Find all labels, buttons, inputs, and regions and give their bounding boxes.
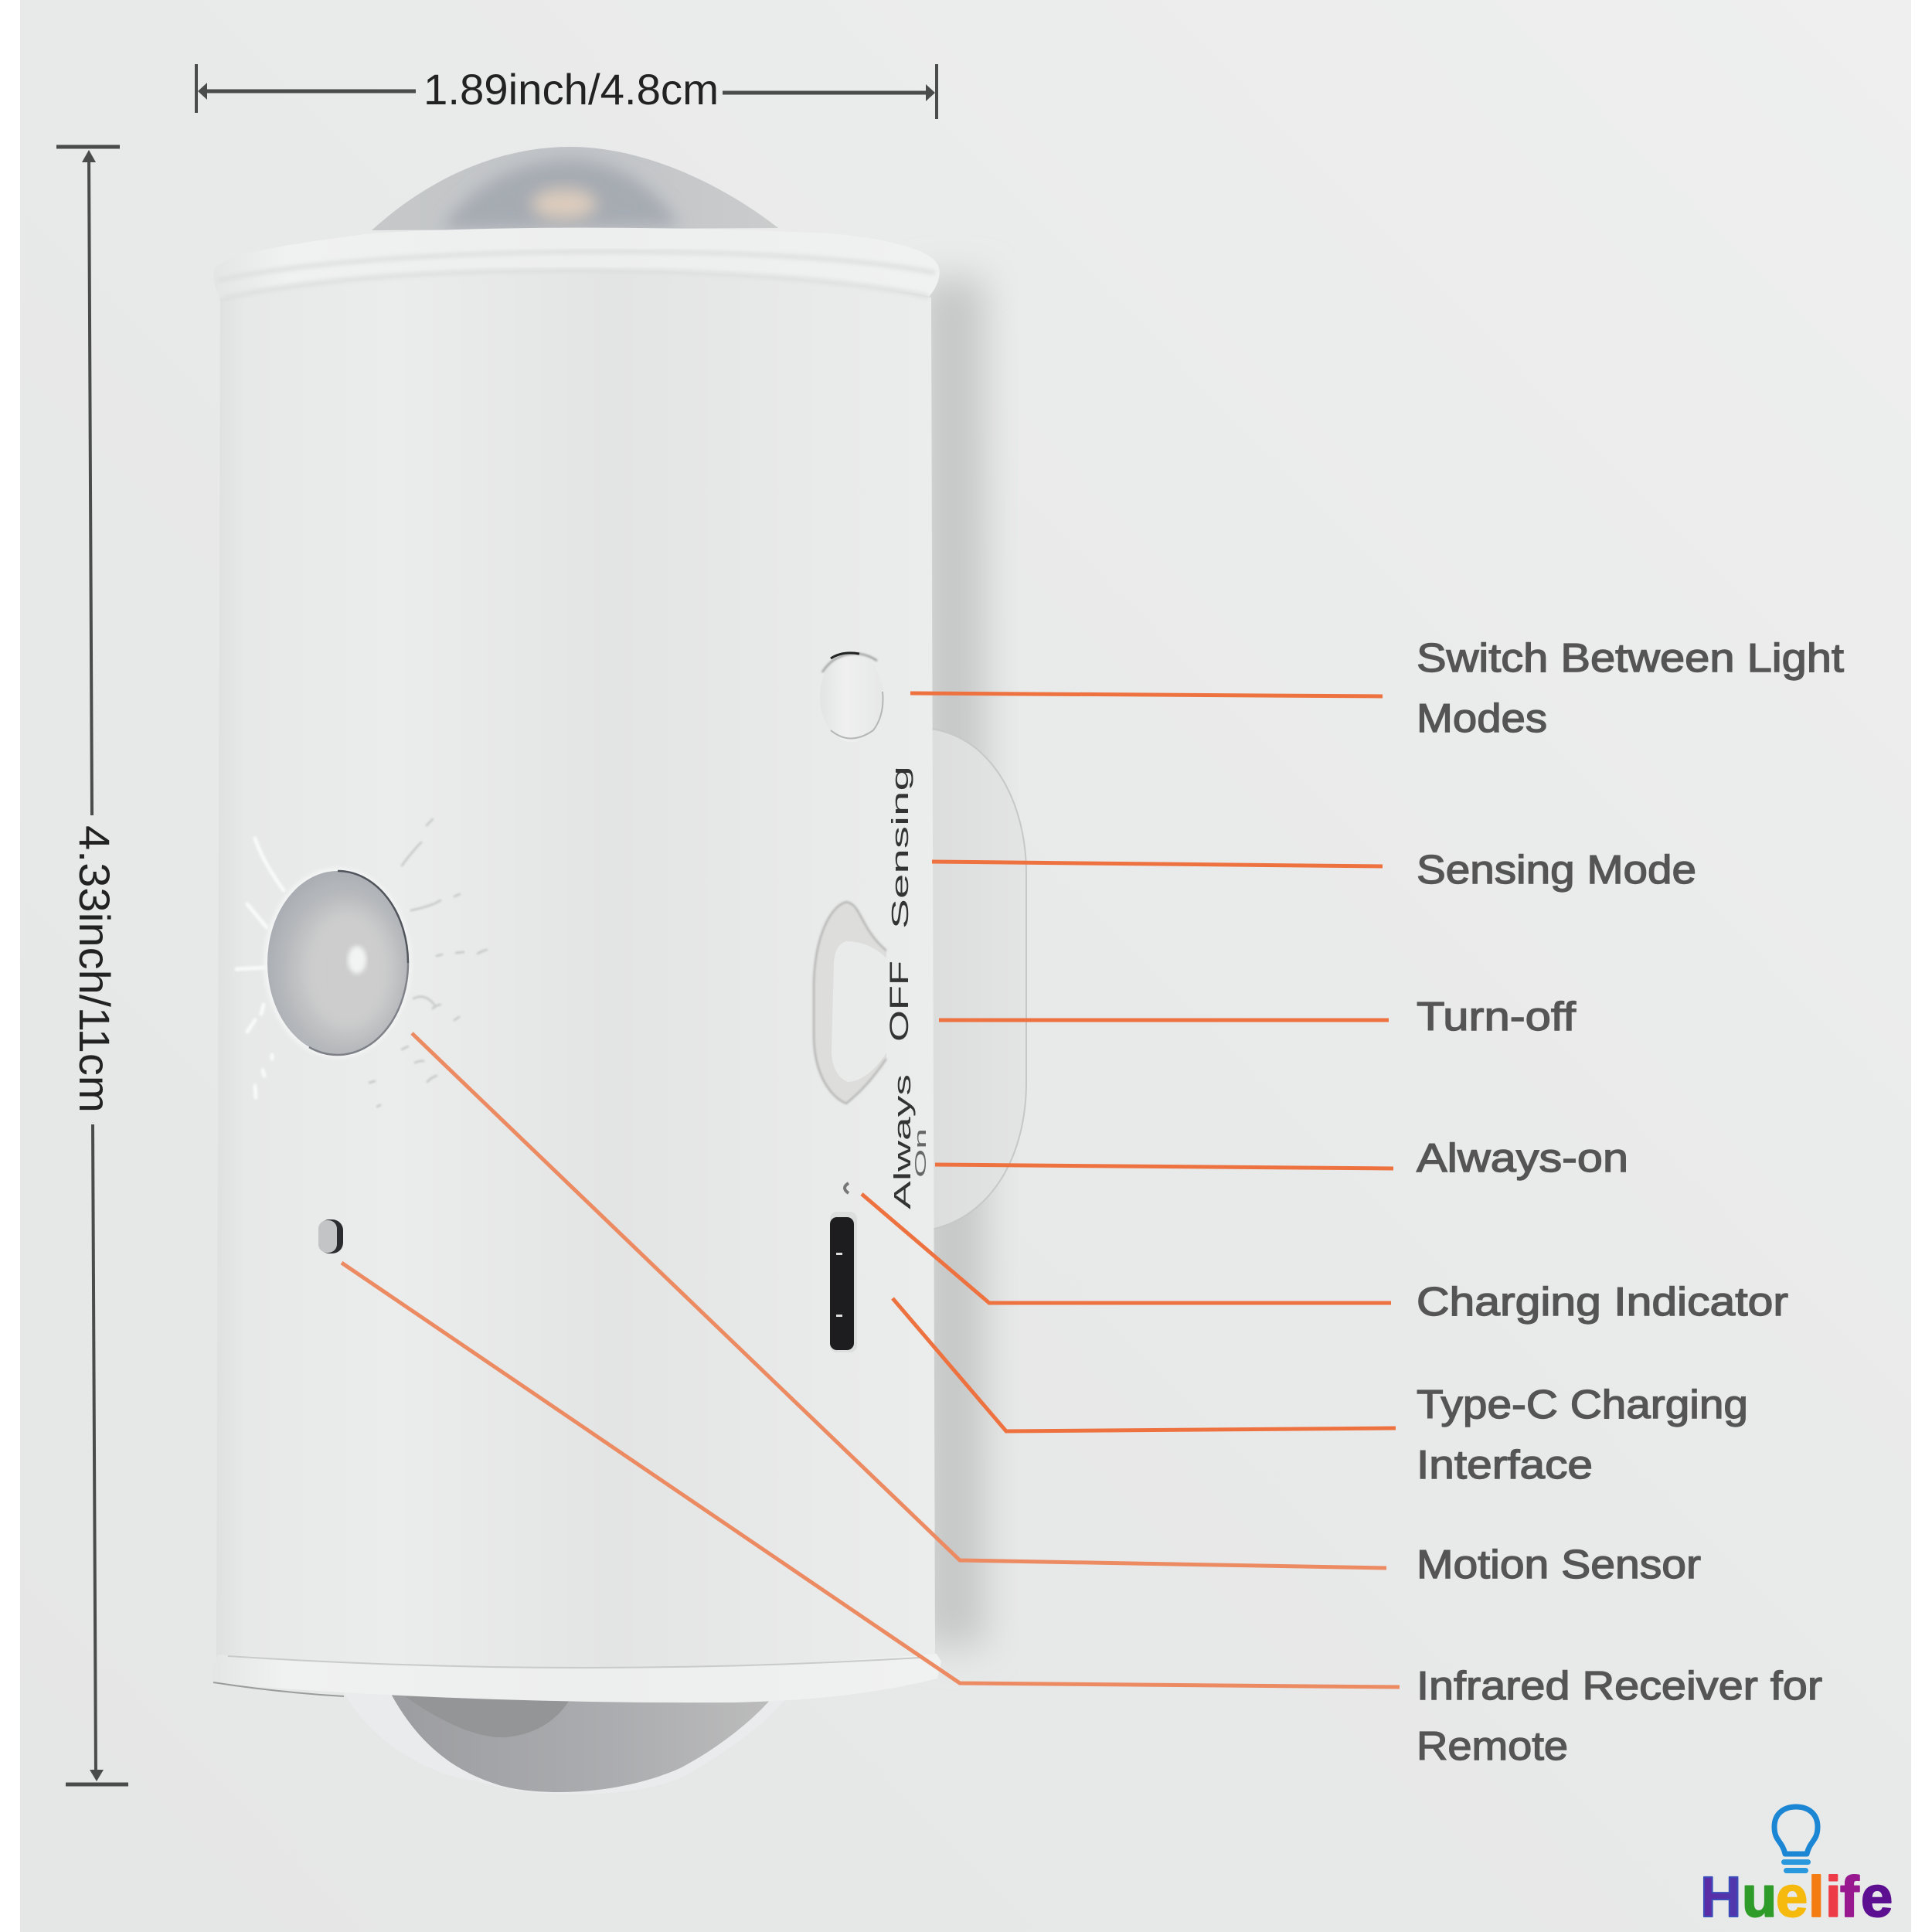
width dimension xyxy=(196,64,937,119)
Type-C port xyxy=(830,1212,857,1352)
line: motion sensor xyxy=(412,1033,1386,1568)
label: type-c charging interface: Interface xyxy=(1417,1443,1593,1488)
label: always-on: Always-on xyxy=(1417,1136,1628,1181)
label: motion sensor: Motion Sensor xyxy=(1417,1543,1701,1587)
height dimension xyxy=(56,147,128,1784)
bottom rim xyxy=(212,1654,941,1702)
label: switch between light modes xyxy=(1417,636,1845,741)
charging indicator LED xyxy=(845,1183,849,1193)
logo wordmark: H xyxy=(1700,1865,1741,1929)
logo wordmark: i xyxy=(1825,1865,1842,1929)
logo wordmark: e xyxy=(1861,1865,1893,1929)
label: infrared receiver for remote xyxy=(1417,1664,1822,1769)
bottom lens dome xyxy=(344,1692,784,1794)
line: always-on xyxy=(935,1165,1393,1168)
sensor sparks xyxy=(236,819,487,1107)
height label: 4.33inch/11cm xyxy=(70,825,119,1113)
mode slider switch xyxy=(814,902,886,1104)
width label: 1.89inch/4.8cm xyxy=(423,65,719,114)
motion sensor lens xyxy=(236,819,487,1107)
wall shadow xyxy=(920,278,985,1646)
switch labels xyxy=(885,766,930,1209)
logo wordmark: e xyxy=(1776,1865,1808,1929)
logo wordmark: f xyxy=(1840,1865,1859,1929)
line: infrared receiver xyxy=(342,1263,1400,1687)
label: infrared receiver for remote: Remote xyxy=(1417,1724,1568,1769)
top rim xyxy=(213,228,940,299)
label: charging indicator: Charging Indicator xyxy=(1417,1280,1788,1325)
top lens dome xyxy=(372,147,778,230)
label: Sensing: Sensing xyxy=(886,766,913,929)
label: type-c charging interface: Type-C Charging xyxy=(1417,1383,1748,1427)
label: infrared receiver for remote: Infrared Receiver for xyxy=(1417,1664,1822,1709)
label: On: On xyxy=(913,1128,930,1178)
feature labels xyxy=(1417,636,1845,1769)
label: switch between light modes: Switch Between Light xyxy=(1417,636,1845,681)
line: type-c interface xyxy=(893,1298,1396,1431)
label: type-c charging interface xyxy=(1417,1383,1748,1488)
Huelife logo xyxy=(1700,1807,1893,1929)
cylindrical body xyxy=(216,267,935,1685)
icon: light bulb xyxy=(1774,1807,1818,1873)
logo wordmark: u xyxy=(1742,1865,1777,1929)
line: turn-off xyxy=(939,1019,1389,1022)
product: motion sensor wall light xyxy=(212,147,1026,1794)
rear mounting bump xyxy=(931,729,1026,1230)
line: charging indicator xyxy=(862,1194,1391,1303)
callout leader lines xyxy=(342,693,1400,1687)
infrared receiver xyxy=(318,1219,343,1253)
line: switch between light modes xyxy=(910,693,1383,696)
label: switch between light modes: Modes xyxy=(1417,696,1547,741)
label: Always: Always xyxy=(889,1074,916,1209)
label: sensing mode: Sensing Mode xyxy=(1417,848,1696,893)
mode button xyxy=(820,652,883,742)
logo wordmark: l xyxy=(1808,1865,1825,1929)
line: sensing mode xyxy=(932,862,1383,866)
label: OFF: OFF xyxy=(885,961,914,1042)
label: turn-off: Turn-off xyxy=(1417,995,1577,1039)
